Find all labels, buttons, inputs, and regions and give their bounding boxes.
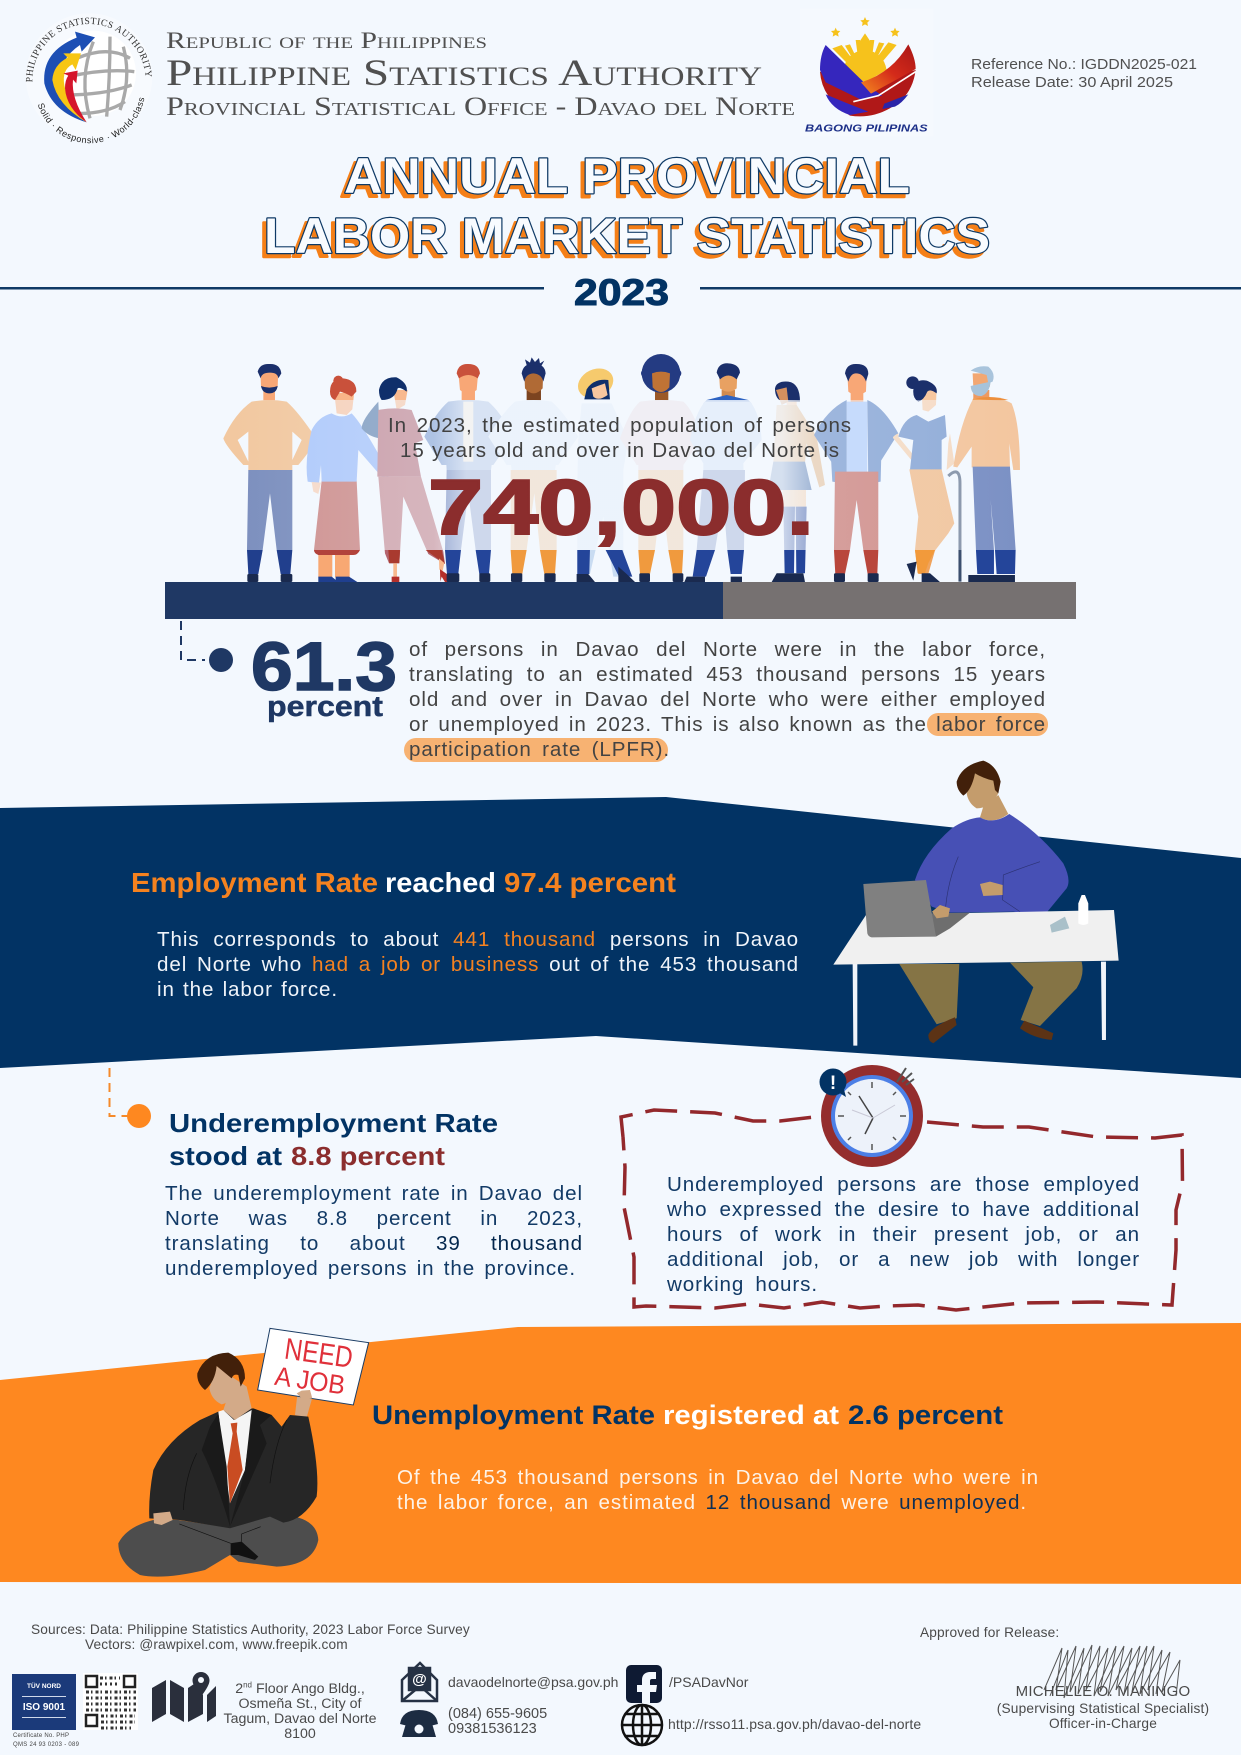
underemployed definition: hours of work in their present job, or an (667, 1223, 1140, 1246)
labor force paragraph: of persons in Davao del Norte were in the labor force, (409, 638, 1046, 661)
sources: Vectors: @rawpixel.com, www.freepik.com (85, 1637, 348, 1652)
underemployment heading: stood at (169, 1141, 282, 1171)
icon: email envelope: @ (412, 1671, 427, 1688)
signatory (997, 1683, 1209, 1731)
icon: map pin (152, 1672, 216, 1722)
person 6 (573, 363, 632, 582)
unemployment heading: 2.6 percent (848, 1400, 1003, 1430)
labor force paragraph: participation rate (LPFR). (409, 738, 670, 761)
employment paragraph: in the labor force. (157, 978, 338, 1001)
employment heading: 97.4 percent (504, 867, 676, 898)
header organisation text (166, 28, 795, 121)
employment heading: reached (385, 867, 496, 898)
icon: telephone (400, 1710, 438, 1737)
person 11 (893, 376, 954, 582)
approval note: Approved for Release: (920, 1625, 1059, 1640)
employment heading: Employment Rate (131, 867, 378, 898)
reference number and release date: Reference No.: IGDDN2025-021 (971, 56, 1197, 73)
header organisation text: Provincial Statistical Office - Davao del Norte (166, 92, 795, 121)
phone numbers (448, 1706, 547, 1737)
underemployment paragraph (165, 1182, 583, 1280)
person 1 (223, 364, 316, 582)
title: ANNUAL PROVINCIAL (340, 152, 906, 208)
title: ANNUAL PROVINCIAL (344, 148, 910, 204)
underemployment heading: 8.8 percent (291, 1141, 445, 1171)
person 10 (814, 364, 898, 582)
person 2 (307, 376, 395, 582)
population bar (165, 582, 1076, 619)
person 12 (953, 366, 1020, 582)
PSA logo: Solid · Responsive · World-class (38, 98, 144, 144)
underemployed definition: Underemployed persons are those employed (667, 1173, 1140, 1196)
cane (948, 472, 960, 582)
ISO 9001 badge: Certificate No. PHP (13, 1733, 69, 1739)
underemployment paragraph: The underemployment rate in Davao del (165, 1182, 583, 1205)
office address: Osmeña St., City of (238, 1696, 362, 1712)
intro text over crowd: 15 years old and over in Davao del Norte is (400, 439, 840, 462)
labor force paragraph (409, 638, 1046, 761)
underemployed definition: who expressed the desire to have additional (667, 1198, 1140, 1221)
person 4 (424, 364, 513, 582)
facebook handle: /PSADavNor (669, 1674, 748, 1690)
intro text over crowd: In 2023, the estimated population of persons (388, 414, 852, 437)
signature (1044, 1645, 1180, 1698)
underemployment heading (169, 1108, 498, 1171)
employment heading (131, 867, 676, 898)
labor force paragraph: translating to an estimated 453 thousand persons 15 years (409, 663, 1046, 686)
signatory: Officer-in-Charge (1049, 1716, 1157, 1731)
person 5 (488, 357, 578, 582)
illustration: man with sign: NEED (283, 1333, 355, 1375)
underemployment paragraph: Norte was 8.8 percent in 2023, (165, 1207, 583, 1230)
PSA logo: PHILIPPINE STATISTICS AUTHORITY (26, 18, 152, 82)
unemployment paragraph: Of the 453 thousand persons in Davao del Norte who were in (397, 1466, 1039, 1489)
PSA logo (26, 18, 152, 144)
dashed callout border (621, 1110, 1182, 1310)
sources (31, 1622, 470, 1652)
illustration: man with sign: A JOB (273, 1361, 347, 1400)
labor force paragraph: old and over in Davao del Norte who were either employed (409, 688, 1046, 711)
icon: alert bubble (820, 1068, 846, 1097)
underemployment paragraph: underemployed persons in the province. (165, 1257, 576, 1280)
employment paragraph: This corresponds to about 441 thousand persons in Davao (157, 928, 799, 951)
office address: 2nd Floor Ango Bldg., (235, 1680, 365, 1697)
illustration: man with sign (118, 1328, 369, 1577)
unemployment paragraph (397, 1466, 1039, 1514)
header organisation text: Philippine Statistics Authority (166, 53, 762, 94)
header organisation text: Republic of the Philippines (166, 28, 487, 53)
underemployed definition: additional job, or a new job with longer (667, 1248, 1140, 1271)
unemployment paragraph: the labor force, an estimated 12 thousand were unemployed. (397, 1491, 1027, 1514)
office address: 8100 (284, 1726, 316, 1742)
Bagong Pilipinas logo: BAGONG PILIPINAS (805, 124, 928, 135)
illustration: crowd of workers (215, 354, 1025, 582)
ISO 9001 badge: QMS 24 93 0203 - 089 (13, 1742, 80, 1748)
year heading with rules: 2023 (574, 272, 669, 313)
signatory: MICHELLE O. MANINGO (1016, 1683, 1190, 1700)
icon: clock (821, 1065, 923, 1167)
connector to 61.3 percent (181, 621, 233, 672)
ISO 9001 badge (12, 1674, 80, 1748)
employment band (0, 797, 1241, 1078)
icon: alert bubble: ! (830, 1073, 836, 1094)
phone numbers: 09381536123 (448, 1721, 537, 1737)
person 6 right shoe (618, 567, 635, 582)
icon: facebook (626, 1665, 662, 1703)
employment paragraph (157, 928, 799, 1001)
reference number and release date: Release Date: 30 April 2025 (971, 74, 1173, 91)
person 8 (684, 363, 762, 582)
person 9 (768, 382, 825, 582)
labor force paragraph: or unemployed in 2023. This is also known as the labor force (409, 713, 1046, 736)
title: LABOR MARKET STATISTICS (260, 212, 986, 268)
sources: Sources: Data: Philippine Statistics Authority, 2023 Labor Force Survey (31, 1622, 470, 1637)
underemployment paragraph: translating to about 39 thousand (165, 1232, 583, 1255)
title (260, 148, 990, 268)
unemployment heading: Unemployment Rate (372, 1400, 655, 1430)
unemployment heading (372, 1400, 1003, 1430)
person 3 (362, 377, 458, 582)
website: http://rsso11.psa.gov.ph/davao-del-norte (668, 1716, 921, 1732)
unemployment band (0, 1323, 1241, 1584)
title: LABOR MARKET STATISTICS (264, 208, 990, 264)
illustration: man at desk (833, 761, 1119, 1046)
person 7 (620, 354, 702, 582)
underemployed definition: working hours. (667, 1273, 818, 1296)
QR code (83, 1673, 138, 1730)
ISO 9001 badge: ISO 9001 (23, 1702, 66, 1713)
icon: globe (622, 1705, 662, 1745)
icon: email envelope (402, 1663, 437, 1701)
intro text over crowd (388, 414, 852, 462)
reference number and release date (971, 56, 1197, 91)
Bagong Pilipinas logo (800, 8, 933, 137)
ISO 9001 badge: TÜV NORD (27, 1681, 61, 1690)
big number: 740,000: 740,000. (428, 463, 814, 551)
phone numbers: (084) 655-9605 (448, 1706, 547, 1722)
office address (224, 1680, 376, 1742)
connector: underemployment (110, 1068, 151, 1128)
unemployment heading: registered at (663, 1400, 839, 1430)
email address: davaodelnorte@psa.gov.ph (448, 1674, 618, 1690)
LFPR highlight (404, 713, 1048, 762)
underemployed definition (667, 1173, 1140, 1296)
employment paragraph: del Norte who had a job or business out of the 453 thousand (157, 953, 799, 976)
underemployment heading: Underemployment Rate (169, 1108, 498, 1138)
office address: Tagum, Davao del Norte (224, 1711, 376, 1727)
signatory: (Supervising Statistical Specialist) (997, 1701, 1209, 1716)
stat: 61.3 percent: percent (267, 691, 383, 723)
stat: 61.3 percent: 61.3 (251, 628, 397, 705)
